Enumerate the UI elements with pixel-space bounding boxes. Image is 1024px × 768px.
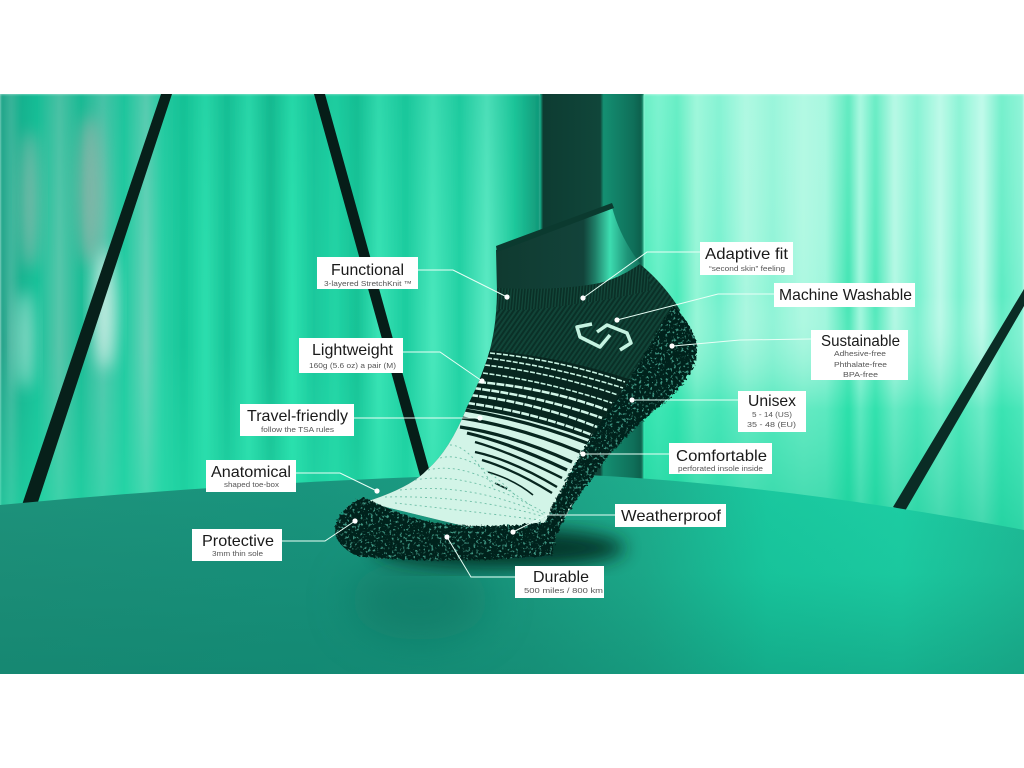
callout: Lightweight <box>299 338 485 384</box>
diagonal frame bar: left <box>22 94 172 505</box>
callout: Unisex: 35 - 48 (EU) <box>747 420 797 429</box>
callout: Protective: 3mm thin sole <box>212 549 263 558</box>
icon: S logo <box>577 324 631 350</box>
callout: Anatomical: shaped toe-box <box>224 480 279 489</box>
callout: Comfortable: perforated insole inside <box>678 464 763 473</box>
stripes <box>385 353 625 520</box>
sock shadow <box>375 528 625 568</box>
callout: Lightweight: 160g (5.6 oz) a pair (M) <box>309 361 397 370</box>
callout: Adaptive fit <box>580 242 793 301</box>
sock reflection on table <box>358 565 486 640</box>
callout: Anatomical: Anatomical <box>211 464 291 481</box>
callout: Unisex <box>629 391 806 432</box>
callout: Unisex: Unisex <box>748 393 796 410</box>
callout: Sustainable: Adhesive-free <box>834 349 886 358</box>
callout: Anatomical <box>206 460 380 494</box>
callout: Adaptive fit: Adaptive fit <box>705 246 789 263</box>
callout: Comfortable: Comfortable <box>676 448 767 465</box>
callout: Protective: Protective <box>202 533 274 550</box>
callout: Sustainable <box>669 330 908 380</box>
callout: Functional: 3-layered StretchKnit ™ <box>324 279 412 288</box>
lower knit toe area <box>370 408 591 528</box>
sock on mannequin <box>335 203 697 560</box>
cuff <box>497 264 652 310</box>
photo background <box>0 94 1024 674</box>
dark striped zone base <box>460 350 632 440</box>
callout: Functional: Functional <box>331 262 404 279</box>
wall panel: dark column <box>540 94 644 494</box>
callout: Unisex: 5 - 14 (US) <box>752 410 793 419</box>
mannequin ankle <box>496 203 642 292</box>
diagonal frame bar: centre <box>314 94 431 476</box>
sock knit body <box>360 264 680 535</box>
callout: Machine Washable: Machine Washable <box>779 287 912 304</box>
callout: Adaptive fit: “second skin” feeling <box>709 264 785 273</box>
wall panel: left <box>0 94 541 514</box>
callout: Functional <box>317 257 510 300</box>
callout: Machine Washable <box>614 283 915 323</box>
callout: Travel-friendly <box>240 404 483 436</box>
callout: Travel-friendly: follow the TSA rules <box>261 425 334 434</box>
callout: Weatherproof <box>510 504 726 535</box>
callout: Weatherproof: Weatherproof <box>621 508 722 525</box>
callout: Durable: Durable <box>533 569 589 586</box>
callout: Sustainable: BPA-free <box>843 370 878 379</box>
callout: Protective <box>192 518 358 561</box>
heel and sole <box>335 305 697 560</box>
wall panel: right <box>643 94 1024 544</box>
callout: Sustainable: Sustainable <box>821 333 900 350</box>
table surface <box>0 473 1024 674</box>
diagonal frame bar: right <box>893 289 1024 511</box>
callout: Comfortable <box>580 443 772 474</box>
callout: Durable <box>444 534 604 598</box>
callout: Lightweight: Lightweight <box>312 342 394 359</box>
callout: Durable: 500 miles / 800 km <box>524 586 603 595</box>
callout: Sustainable: Phthalate-free <box>834 360 887 369</box>
callout: Travel-friendly: Travel-friendly <box>247 408 348 425</box>
